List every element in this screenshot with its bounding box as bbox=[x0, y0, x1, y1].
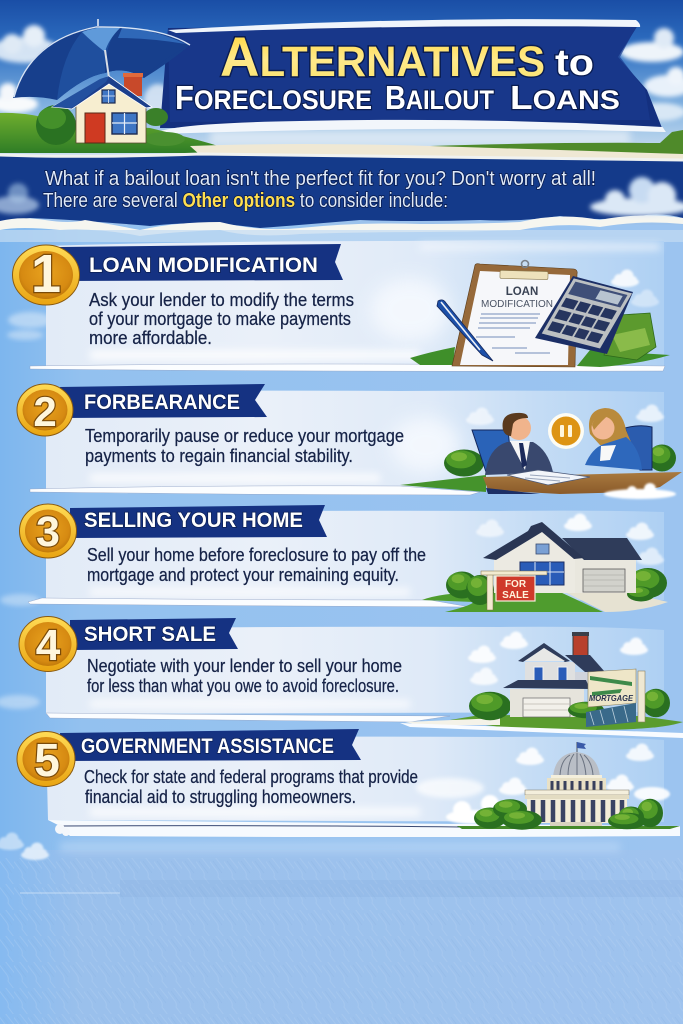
heading: SELLING YOUR HOME bbox=[84, 509, 303, 532]
intro text line 2: There are several Other options to consider include: bbox=[43, 189, 448, 212]
ribbon bbox=[60, 729, 361, 761]
description bbox=[87, 544, 426, 585]
badge 5 bbox=[17, 732, 75, 786]
badge 5: 5 bbox=[34, 734, 60, 786]
ribbon bbox=[60, 244, 343, 281]
chimney bbox=[124, 74, 142, 96]
icon: clipboard, calculator, cash: MODIFICATION bbox=[481, 299, 553, 310]
for sale sign bbox=[481, 571, 547, 610]
title line 2 bbox=[175, 79, 620, 116]
heading: LOAN MODIFICATION bbox=[89, 254, 318, 277]
woman bbox=[585, 408, 642, 470]
badge 4: 4 bbox=[36, 621, 61, 670]
panel 3: selling your home bbox=[20, 504, 668, 612]
heading: GOVERNMENT ASSISTANCE bbox=[81, 735, 334, 758]
icon: clipboard, calculator, cash: LOAN bbox=[506, 286, 538, 298]
umbrella bbox=[13, 19, 190, 100]
icon: house with mortgage sign bbox=[405, 632, 683, 730]
description bbox=[87, 655, 402, 696]
badge 3: 3 bbox=[36, 508, 60, 556]
description: Negotiate with your lender to sell your home bbox=[87, 655, 402, 676]
intro section bbox=[0, 154, 683, 242]
house body bbox=[76, 80, 146, 143]
for sale sign: FOR bbox=[505, 579, 527, 590]
icon: capitol building bbox=[446, 742, 680, 830]
description: Check for state and federal programs that provide bbox=[84, 766, 418, 787]
man bbox=[485, 413, 553, 475]
panel 5: government assistance bbox=[17, 723, 683, 837]
badge 3 bbox=[20, 504, 76, 558]
panel 1: loan modification bbox=[12, 240, 670, 371]
intro text line 1: What if a bailout loan isn't the perfect fit for you? Don't worry at all! bbox=[45, 167, 596, 190]
badge 2: 2 bbox=[33, 388, 57, 435]
for sale sign: SALE bbox=[502, 590, 529, 601]
badge 1 bbox=[12, 244, 80, 305]
door bbox=[85, 113, 105, 143]
pause badge bbox=[548, 413, 584, 449]
header: sky clouds bbox=[0, 25, 683, 146]
intro clouds bbox=[0, 177, 683, 216]
icon: clipboard, calculator, cash bbox=[410, 260, 670, 367]
description: of your mortgage to make payments bbox=[89, 308, 351, 329]
description bbox=[84, 766, 418, 807]
badge 4 bbox=[19, 616, 77, 672]
description: Ask your lender to modify the terms bbox=[89, 289, 354, 310]
badge 1: 1 bbox=[31, 244, 61, 304]
description bbox=[89, 289, 354, 348]
calculator bbox=[535, 276, 633, 354]
title line 2: FORECLOSURE bbox=[175, 79, 372, 116]
panel 4: short sale bbox=[19, 616, 683, 730]
window bbox=[112, 113, 137, 134]
title line 1: to bbox=[555, 42, 594, 83]
table bbox=[483, 472, 682, 494]
icon: umbrella over house bbox=[13, 19, 190, 146]
ribbon bbox=[60, 384, 267, 418]
description: more affordable. bbox=[89, 327, 212, 348]
panel 2: forbearance bbox=[17, 384, 682, 499]
description: mortgage and protect your remaining equity. bbox=[87, 564, 399, 585]
description: Sell your home before foreclosure to pay off the bbox=[87, 544, 426, 565]
mortgage sign bbox=[586, 669, 645, 727]
description: financial aid to struggling homeowners. bbox=[85, 786, 356, 807]
ribbon bbox=[70, 618, 238, 650]
description: for less than what you owe to avoid foreclosure. bbox=[87, 675, 399, 696]
ribbon bbox=[70, 505, 327, 538]
badge 2 bbox=[17, 384, 73, 436]
heading: SHORT SALE bbox=[84, 623, 216, 646]
bushes bbox=[36, 105, 185, 146]
icon: house with for sale sign bbox=[422, 522, 668, 612]
description bbox=[85, 425, 404, 466]
heading: FORBEARANCE bbox=[84, 391, 240, 414]
icon: advisor and homeowner at a table bbox=[400, 408, 682, 499]
title line 2: LOANS bbox=[510, 79, 620, 116]
ground strip bbox=[0, 113, 683, 159]
title line 2: BAILOUT bbox=[385, 79, 494, 116]
title line 1: ALTERNATIVES bbox=[220, 25, 545, 88]
title banner bbox=[158, 19, 664, 133]
mortgage sign: MORTGAGE bbox=[589, 693, 633, 703]
description: Temporarily pause or reduce your mortgage bbox=[85, 425, 404, 446]
description: payments to regain financial stability. bbox=[85, 445, 353, 466]
